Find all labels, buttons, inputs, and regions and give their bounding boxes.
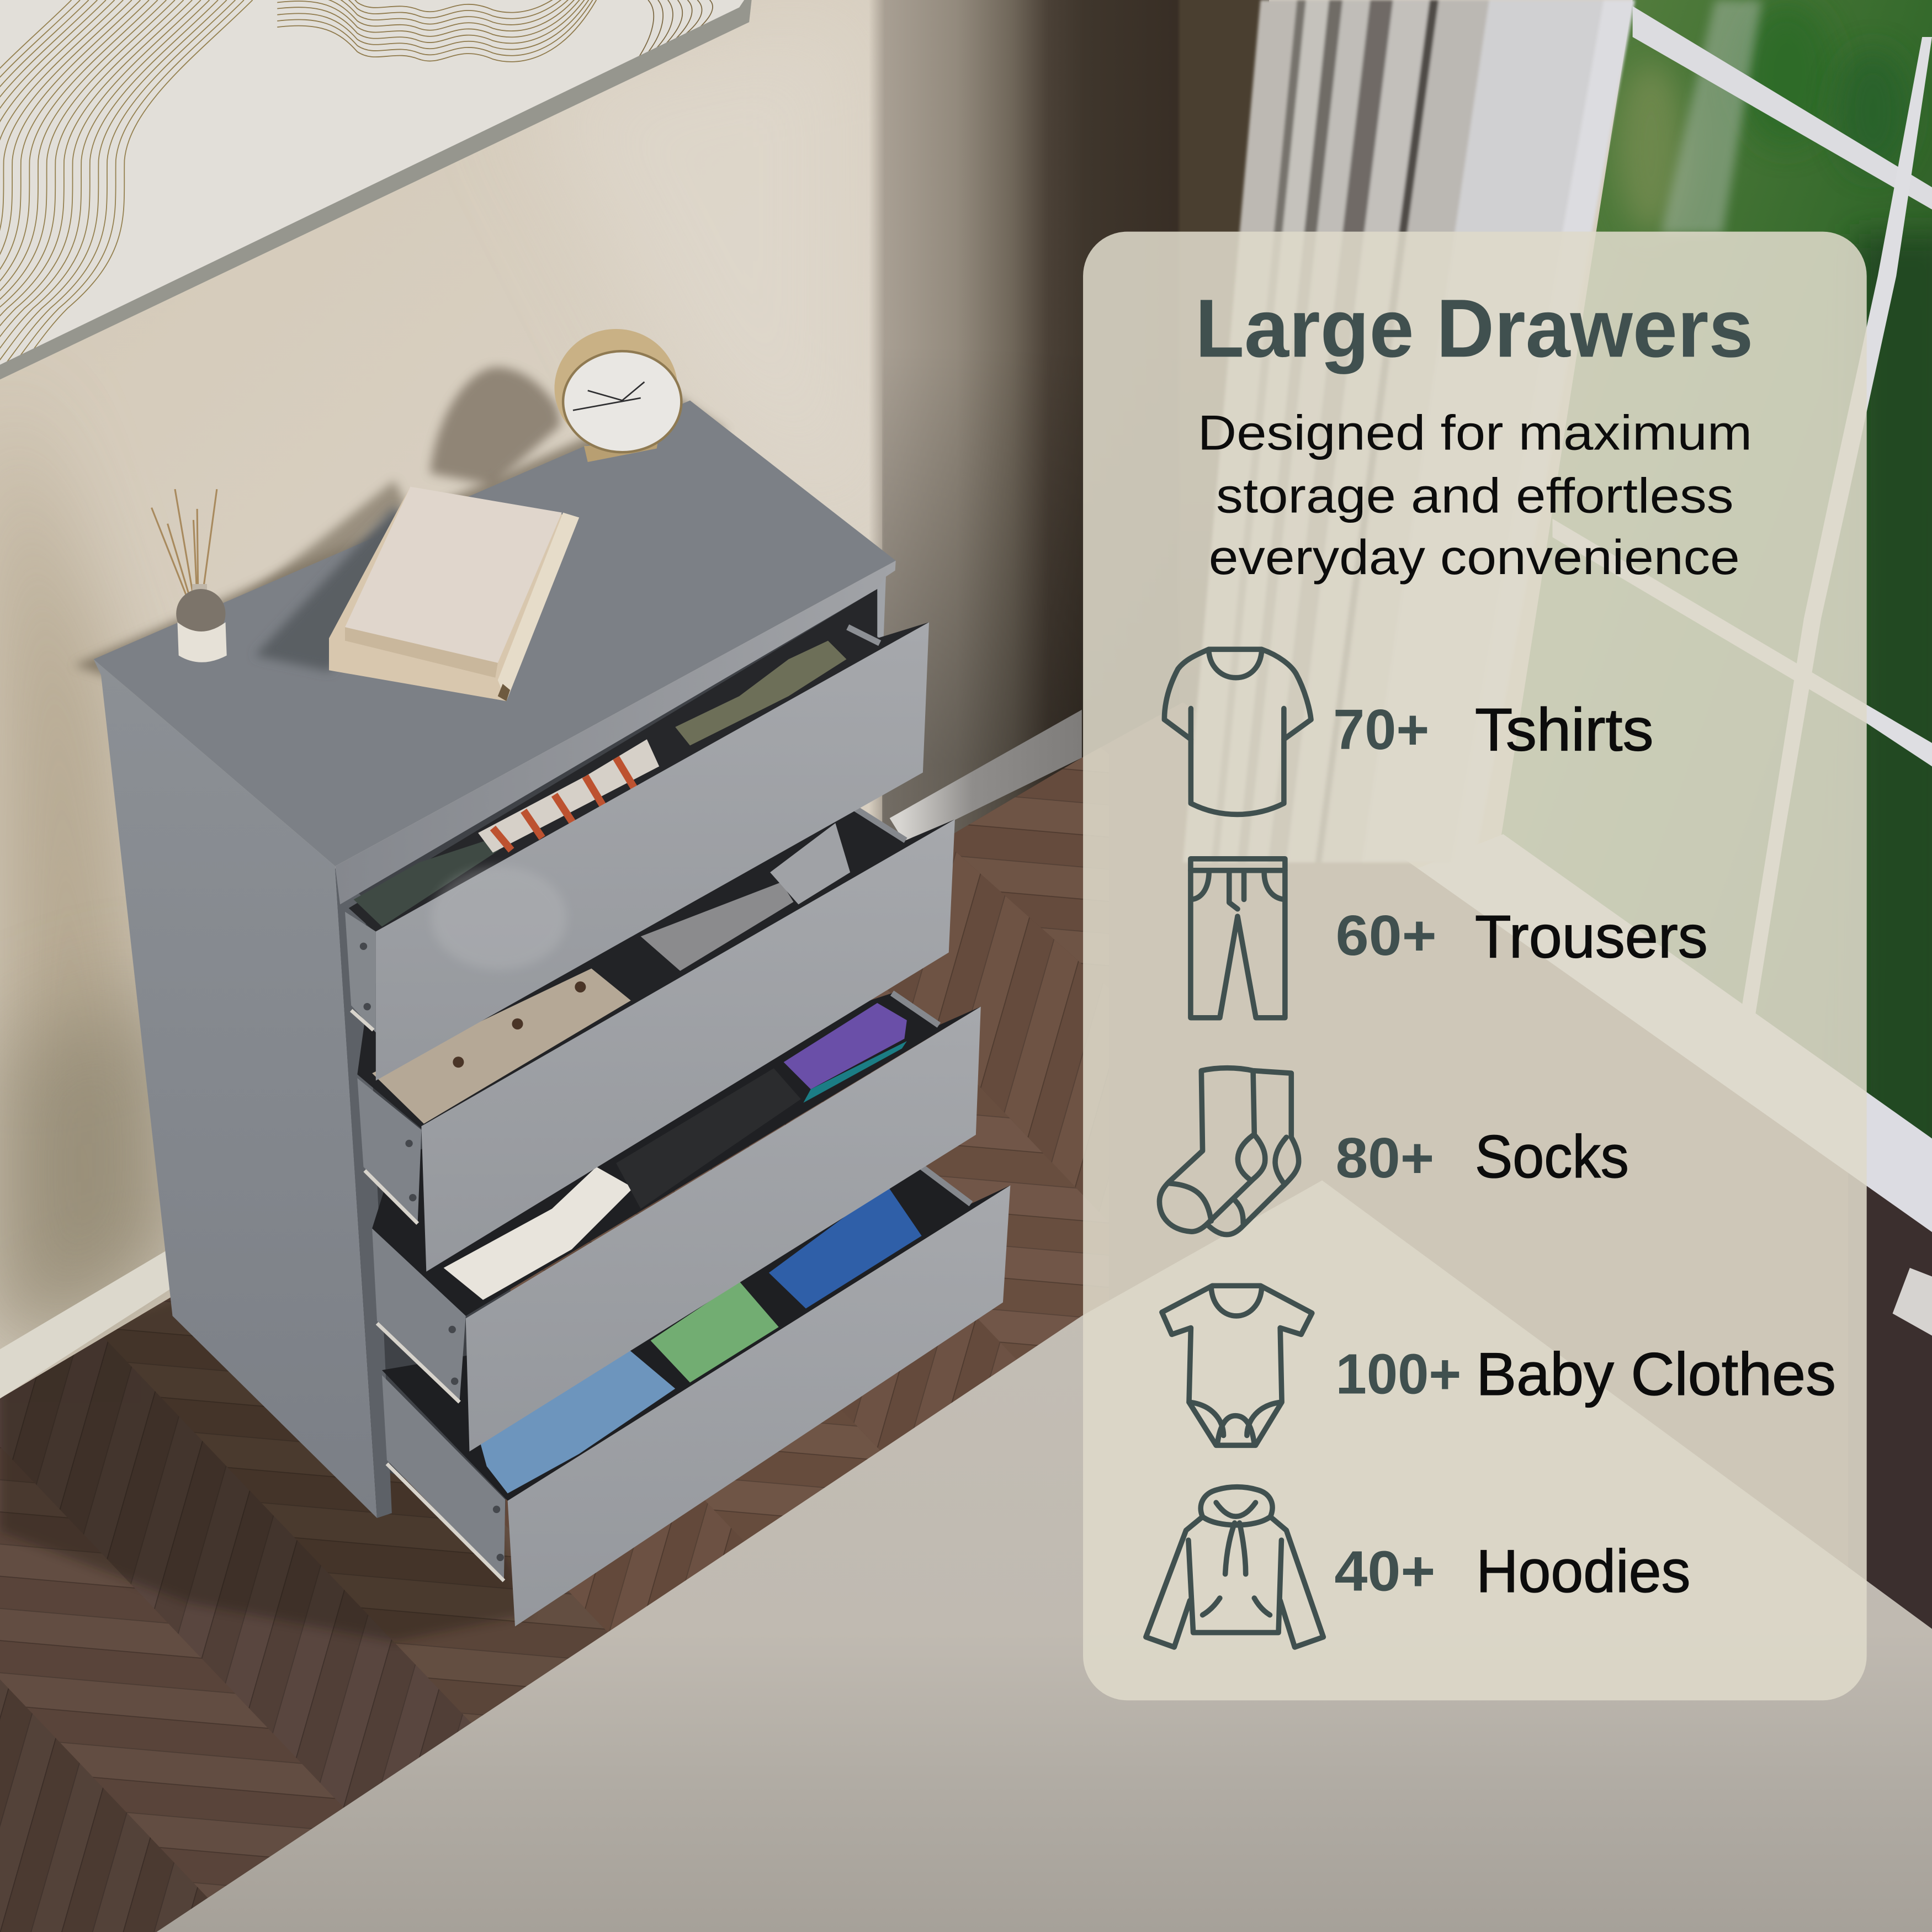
cabinet top front edge [335, 561, 896, 904]
bottom right floor trim [1893, 1268, 1932, 1336]
skirting boards [0, 710, 1082, 1398]
icon: trousers [1191, 859, 1285, 1018]
icon: hoodie [1146, 1487, 1323, 1647]
description [1198, 405, 1752, 585]
curtain [1183, 0, 1635, 862]
row: socks [1159, 1068, 1629, 1235]
label: Hoodies [1476, 1538, 1690, 1605]
cabinet inner gap [335, 589, 882, 1518]
drawer 3 front [466, 1007, 981, 1451]
chest of drawers [94, 329, 1010, 1626]
cabinet side post [875, 577, 886, 641]
row: baby clothes [1162, 1286, 1836, 1445]
row: trousers [1191, 859, 1708, 1018]
info panel [1083, 232, 1867, 1700]
drawer 2 side [357, 1078, 421, 1224]
wall background [0, 0, 1932, 1479]
icon: baby bodysuit [1162, 1286, 1312, 1445]
count: 80+ [1336, 1126, 1434, 1190]
count: 70+ [1333, 698, 1429, 761]
title: Large Drawers [1195, 282, 1753, 374]
drawer 3 interior with clothes [372, 993, 981, 1316]
label: Tshirts [1475, 696, 1654, 763]
reed diffuser [152, 489, 227, 662]
books [329, 487, 579, 701]
window with garden view [1501, 0, 1932, 1232]
drawer 4 interior with clothes [382, 1164, 1010, 1501]
drawer 2 interior with clothes [357, 806, 955, 1129]
rug [156, 1180, 1932, 1932]
drawer 1 side [345, 912, 376, 1033]
wooden herringbone floor [0, 757, 1932, 1932]
drawer 1 interior with clothes [349, 589, 929, 933]
shadows on the wall [74, 367, 727, 690]
label: Baby Clothes [1476, 1341, 1836, 1408]
drawer 2 front [421, 819, 955, 1272]
label: Trousers [1475, 903, 1708, 970]
count: 60+ [1336, 904, 1437, 967]
count: 100+ [1336, 1342, 1461, 1406]
label: Socks [1475, 1123, 1629, 1191]
alarm clock [554, 329, 683, 462]
cabinet top [94, 400, 896, 866]
count: 40+ [1334, 1540, 1435, 1603]
painting on the wall [0, 0, 752, 379]
icon: t-shirt [1164, 649, 1311, 814]
description: everyday convenience [1209, 529, 1740, 585]
drawer 1 front [376, 622, 929, 1081]
row: t-shirts [1164, 649, 1654, 814]
panel background [1083, 232, 1867, 1700]
row: hoodies [1146, 1487, 1690, 1647]
drawer 3 side [372, 1228, 466, 1402]
drawer 4 front [508, 1185, 1010, 1626]
cabinet side panel [94, 659, 377, 1518]
book shadow [255, 508, 419, 672]
description: storage and effortless [1216, 468, 1734, 523]
description: Designed for maximum [1198, 405, 1752, 460]
icon: socks [1159, 1068, 1299, 1235]
drawer 4 side [382, 1375, 505, 1581]
